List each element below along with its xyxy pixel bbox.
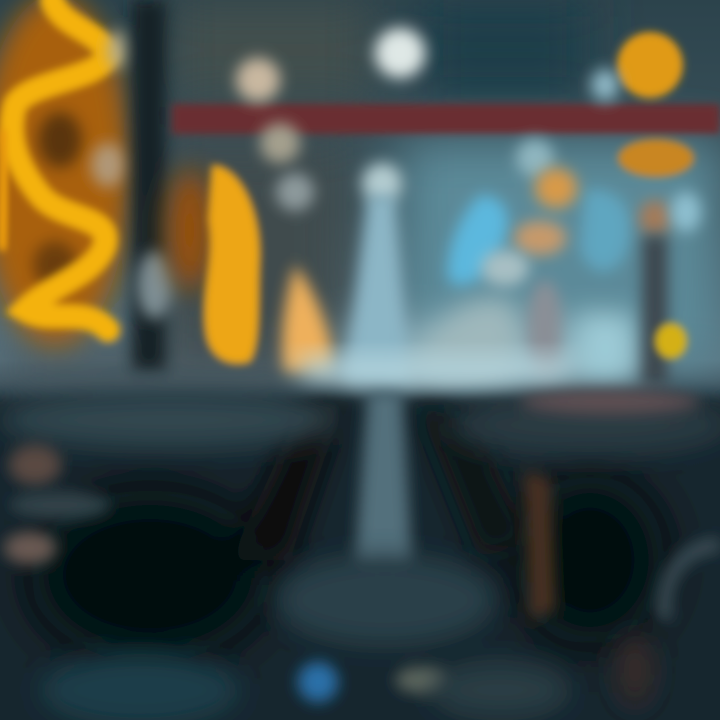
bottom blue tile	[298, 662, 338, 702]
horizon glow	[300, 358, 570, 382]
icon: orange orb	[617, 32, 683, 98]
lights: glowing orbs	[236, 28, 554, 211]
orb side glow	[591, 69, 619, 101]
pillar highlight	[137, 251, 173, 319]
flame glow	[166, 170, 214, 290]
icon: molten squiggle	[12, 0, 108, 330]
icon: orange disc	[618, 139, 694, 177]
central flame	[204, 165, 260, 364]
dark pillar	[132, 0, 166, 370]
bottom light tile	[396, 667, 448, 693]
panel: dark machinery foreground	[0, 390, 720, 720]
warm lower right	[615, 632, 655, 708]
background haze	[0, 0, 720, 390]
warm patches	[9, 445, 61, 485]
red overhead beam	[172, 104, 720, 134]
centre conveyor strip	[355, 392, 412, 565]
blue sparks	[410, 168, 701, 380]
right post	[642, 235, 668, 385]
bottom left tile	[40, 654, 240, 720]
panel: left furnace glow	[0, 0, 130, 345]
small flame	[282, 265, 332, 372]
icon: small yellow light	[655, 323, 687, 359]
right ridges	[450, 395, 720, 455]
right coil	[664, 545, 720, 620]
left ridges	[0, 392, 340, 448]
conveyor base	[275, 555, 495, 645]
light beam	[345, 195, 410, 380]
bottom centre tile	[430, 662, 570, 718]
